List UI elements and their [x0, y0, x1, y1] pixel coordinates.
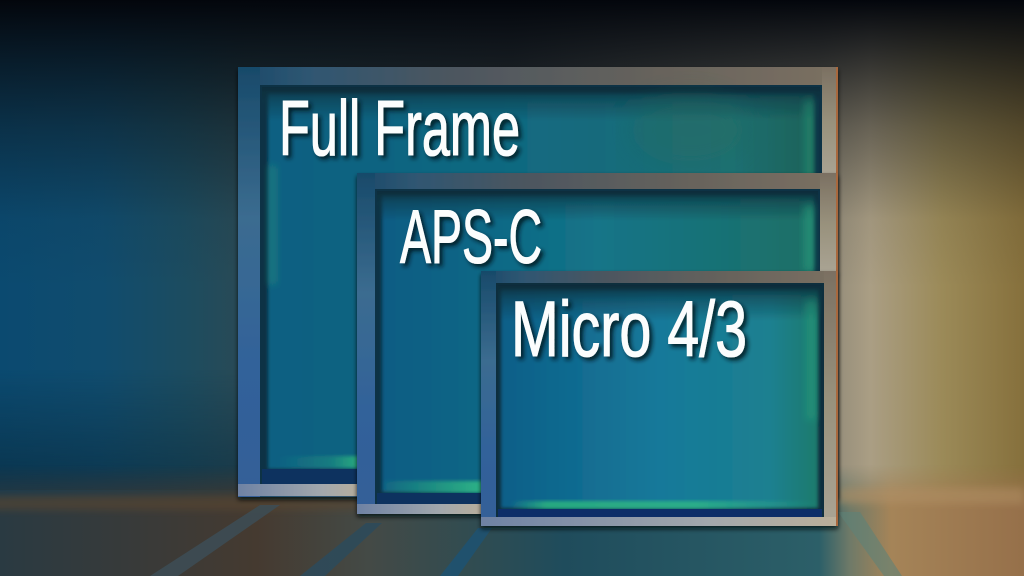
- label: APS-C: APS-C: [400, 195, 542, 280]
- sensor: APS-C: [357, 173, 838, 514]
- label: Micro 4/3: Micro 4/3: [511, 284, 747, 373]
- sensor: Micro 4/3: [481, 271, 838, 526]
- label: Full Frame: Full Frame: [279, 84, 520, 172]
- sensor: Full Frame: [238, 67, 838, 497]
- tabletop floor: [0, 465, 1024, 576]
